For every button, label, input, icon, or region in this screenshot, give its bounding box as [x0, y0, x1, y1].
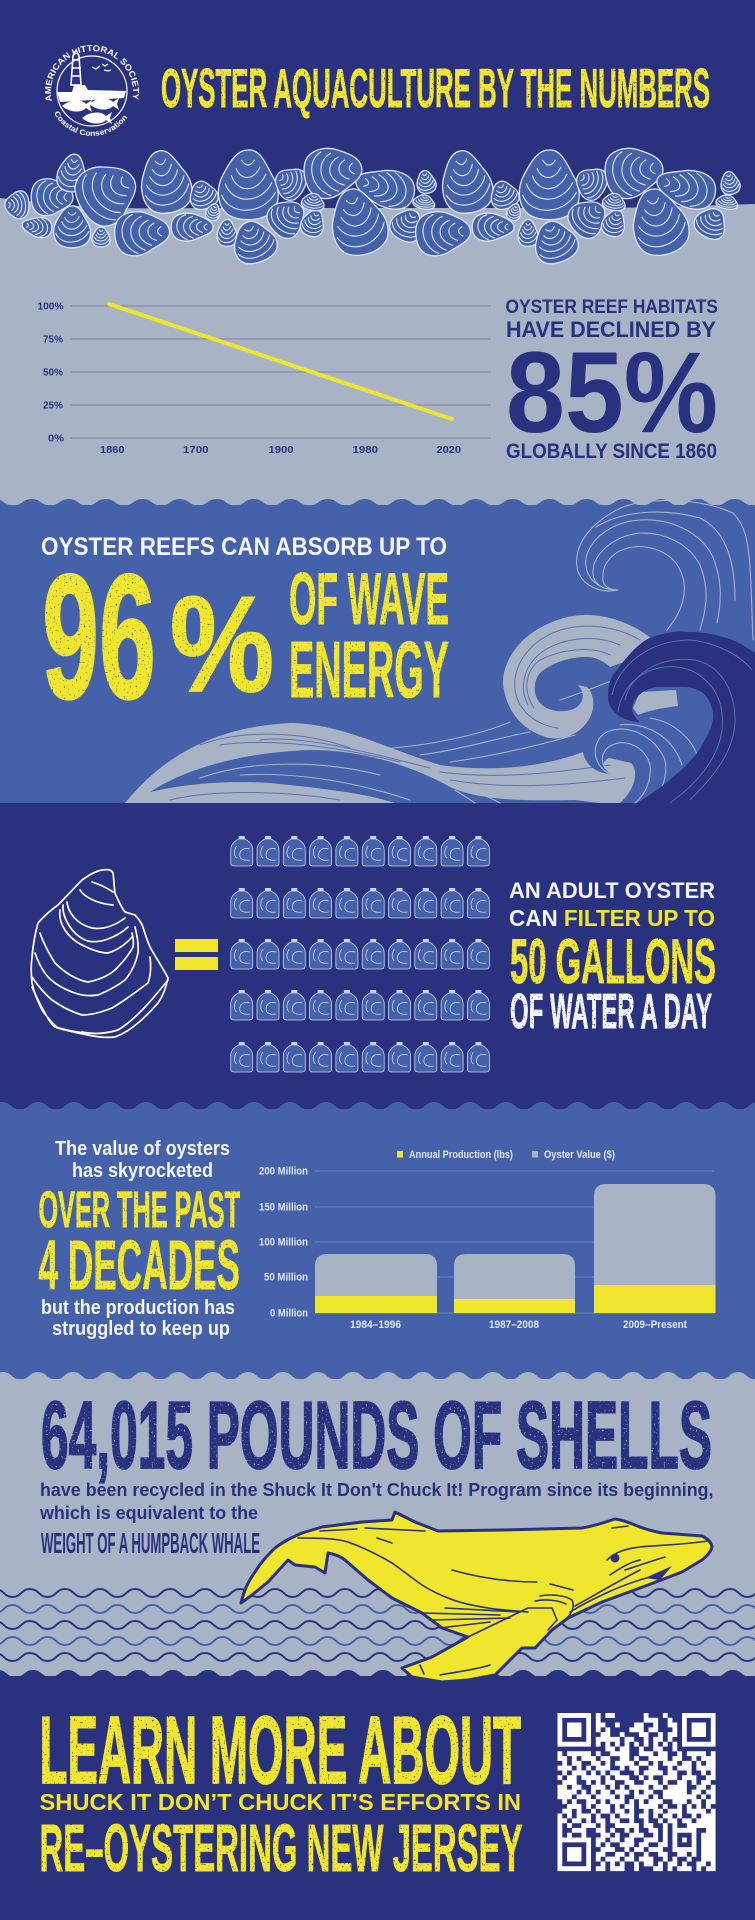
panel: filter section background — [0, 803, 755, 1112]
chart legend: Annual Production (lbs) — [409, 1149, 513, 1161]
logo: American Littoral Society: Coastal Conservation — [55, 111, 128, 136]
icon grid: 50 gallon jugs — [231, 836, 489, 1072]
text block: adult oyster filter: CAN FILTER UP TO — [509, 905, 715, 931]
text block: value of oysters: The value of oysters — [55, 1138, 230, 1160]
logo: American Littoral Society: AMERICAN LITTORAL SOCIETY — [45, 45, 140, 101]
bar chart: production and value: 150 Million — [259, 1202, 308, 1214]
bar chart: production and value: 2009–Present — [623, 1319, 687, 1331]
chart legend: Oyster Value ($) — [544, 1149, 615, 1161]
panel: shells section background — [0, 1379, 755, 1679]
panel: wave energy section background — [0, 505, 755, 803]
QR code — [558, 1715, 716, 1869]
illustration: row of oyster shells — [5, 143, 741, 269]
text block: value of oysters: 4 DECADES — [38, 1226, 240, 1304]
panel: call to action background — [0, 1676, 755, 1920]
text block: recycling program: have been recycled in the Shuck It Don't Chuck It! Program since its beginning, — [40, 1479, 714, 1500]
line chart: reef decline: 50% — [43, 368, 63, 378]
big number: 96%: 96 — [42, 537, 156, 736]
text block: recycling program: WEIGHT OF A HUMPBACK WHALE — [41, 1528, 260, 1560]
panel: header background — [0, 0, 755, 210]
icon: equals sign — [175, 939, 218, 970]
lines between waves — [392, 650, 690, 762]
text block: 85 percent decline: HAVE DECLINED BY — [506, 317, 716, 342]
bar chart: production and value: 1987–2008 — [489, 1319, 539, 1331]
text block: 85 percent decline: GLOBALLY SINCE 1860 — [506, 440, 717, 463]
whale details — [298, 1526, 708, 1675]
line chart: reef decline: 1860 — [100, 445, 125, 456]
decorative wave lines — [0, 1586, 755, 1664]
wave edge: blue to gray — [0, 1372, 755, 1381]
wave edge: gray to blue — [0, 499, 755, 507]
logo: American Littoral Society — [45, 45, 140, 136]
illustration: ocean waves — [125, 500, 755, 803]
icon: oyster outline — [31, 870, 168, 1037]
gray curl wave — [503, 615, 653, 738]
bar chart: production and value: 1984–1996 — [350, 1319, 401, 1331]
wave edge: gray to navy — [0, 1670, 755, 1678]
text: OVER THE PAST — [38, 1181, 240, 1238]
bar chart: production and value: 200 Million — [259, 1166, 308, 1178]
text block: value of oysters: but the production has — [41, 1297, 235, 1319]
line chart: reef decline: 1980 — [352, 445, 378, 456]
bar chart: production and value: 0 Million — [270, 1308, 308, 1320]
line chart: reef decline: 0% — [48, 434, 64, 444]
blue spiral wave — [583, 715, 705, 803]
bar chart: production and value: 100 Million — [259, 1236, 308, 1248]
bar 1984-1996 — [315, 1254, 437, 1313]
text block: 85 percent decline: OYSTER REEF HABITATS — [506, 296, 718, 318]
text block: adult oyster filter — [509, 878, 716, 1039]
line chart: reef decline: 25% — [43, 400, 63, 412]
chart legend — [397, 1149, 615, 1161]
big number: 96%: % — [170, 568, 274, 720]
panel: value chart section background — [0, 1109, 755, 1382]
text: OF WAVE — [289, 559, 449, 640]
dark crest wave — [608, 632, 755, 803]
line chart: reef decline: 1700 — [183, 445, 209, 456]
bar 2009-present — [594, 1184, 716, 1313]
line chart: reef decline: 75% — [43, 334, 63, 346]
wave edge: navy to blue — [0, 1102, 755, 1111]
text: oyster reefs can absorb: OYSTER REEFS CAN ABSORB UP TO — [41, 533, 447, 561]
text block: value of oysters: has skyrocketed — [72, 1160, 213, 1182]
panel: gray decline section background — [0, 198, 755, 507]
blue band over lower wave — [150, 750, 600, 803]
lower sweeping gray wave — [125, 723, 640, 803]
text: of wave energy — [289, 559, 449, 714]
bar 1987-2008 — [454, 1254, 575, 1313]
text block: 85 percent decline: 85% — [506, 329, 718, 457]
text block: recycling program: which is equivalent to the — [39, 1502, 258, 1523]
bar chart: production and value: 50 Million — [264, 1272, 308, 1284]
bar chart: production and value — [259, 1149, 716, 1331]
line chart: reef decline: 2020 — [436, 445, 461, 456]
line chart: reef decline: 100% — [38, 302, 64, 312]
text: ENERGY — [289, 625, 449, 714]
line chart: reef decline: 1900 — [268, 445, 294, 456]
line chart: reef decline — [38, 302, 491, 456]
subheading: shuck it efforts: SHUCK IT DON’T CHUCK IT’S EFFORTS IN — [40, 1789, 521, 1815]
text block: value of oysters — [38, 1138, 240, 1340]
illustration: humpback whale — [241, 1512, 712, 1682]
text block: adult oyster filter: AN ADULT OYSTER — [509, 878, 715, 903]
top outlined wave — [577, 500, 753, 640]
text block: recycling program — [39, 1479, 713, 1560]
gray wave seen inside the crest curl — [633, 690, 678, 715]
text block: value of oysters: struggled to keep up — [52, 1318, 230, 1340]
